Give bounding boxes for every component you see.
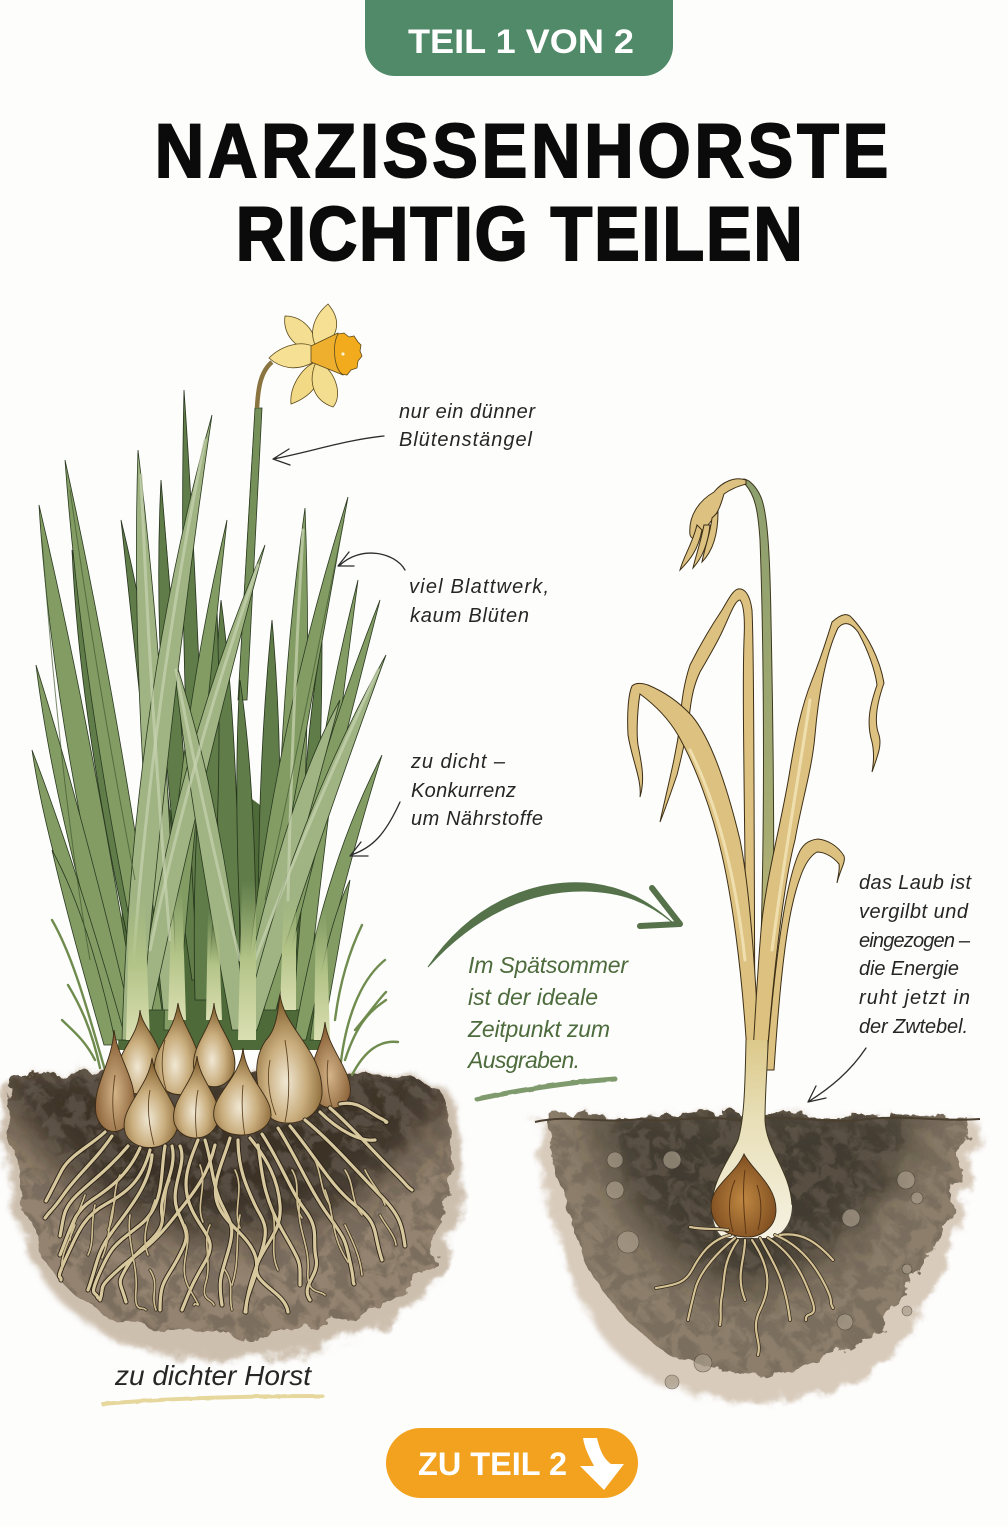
flower centre xyxy=(341,352,345,356)
mid leaves xyxy=(32,460,382,1045)
header tab label: TEIL 1 VON 2 xyxy=(408,23,634,61)
bulbs xyxy=(95,994,350,1148)
bulb roots xyxy=(45,1103,412,1312)
annotation: too dense xyxy=(350,751,543,856)
arrow xyxy=(350,802,400,856)
note: late summer xyxy=(466,952,629,1099)
thin flower stalk xyxy=(238,408,262,700)
note: late summer: Ausgraben. xyxy=(466,1047,580,1073)
roots xyxy=(656,1227,833,1355)
title: NARZISSENHORSTE xyxy=(155,110,888,194)
soil: single bulb xyxy=(536,1100,980,1403)
trumpet xyxy=(311,333,343,375)
light front leaves xyxy=(42,415,386,1040)
annotation: yellowed foliage: der Zwtebel. xyxy=(859,1016,968,1038)
petals xyxy=(285,316,316,350)
title xyxy=(155,110,888,277)
plant: dense narcissus clump xyxy=(32,390,412,1312)
button: to part 2 xyxy=(386,1428,638,1498)
header tab xyxy=(365,0,673,76)
annotation: yellowed foliage: vergilbt und xyxy=(859,901,969,923)
annotation: thin stalk: nur ein dünner xyxy=(399,401,536,423)
button: to part 2: ZU TEIL 2 xyxy=(418,1446,567,1482)
label: too dense clump xyxy=(103,1360,322,1404)
note: late summer: Im Spätsommer xyxy=(468,952,629,978)
annotation: thin stalk: Blütenstängel xyxy=(399,429,533,451)
annotation: yellowed foliage: das Laub ist xyxy=(859,872,972,894)
yellow underline xyxy=(103,1396,322,1404)
brown bulb xyxy=(711,1154,776,1237)
annotation: much foliage xyxy=(338,552,549,627)
pale lower stem xyxy=(712,1040,792,1238)
curved green arrow xyxy=(428,883,680,967)
annotation: yellowed foliage: die Energie xyxy=(859,958,959,980)
soil: dense clump xyxy=(0,1060,470,1358)
annotation: too dense: zu dicht – xyxy=(410,751,506,773)
note: late summer: ist der ideale xyxy=(468,984,598,1010)
green brush underline xyxy=(477,1079,615,1099)
wilted flower xyxy=(680,479,746,570)
lower stem outline xyxy=(712,1040,792,1205)
plant: withered narcissus xyxy=(628,479,884,1355)
arrow xyxy=(338,552,405,570)
pale leaf stems above bulbs xyxy=(126,880,330,1040)
annotation: too dense: Konkurrenz xyxy=(411,780,516,802)
annotation: yellowed foliage: eingezogen – xyxy=(859,930,971,952)
arrow xyxy=(808,1048,866,1102)
icon: bent arrow xyxy=(580,1438,624,1490)
note: late summer: Zeitpunkt zum xyxy=(467,1016,610,1042)
annotation: yellowed foliage xyxy=(808,872,972,1102)
annotation: much foliage: viel Blattwerk, xyxy=(409,576,549,598)
dark rear leaves xyxy=(72,390,322,1000)
title: RICHTIG TEILEN xyxy=(236,193,803,277)
annotation: too dense: um Nährstoffe xyxy=(411,808,543,830)
dark foliage mass xyxy=(118,790,330,1050)
soil surface and stones xyxy=(535,1118,980,1389)
arrow xyxy=(273,436,384,465)
side grass xyxy=(52,920,398,1075)
annotation: thin stalk xyxy=(273,401,536,465)
annotation: yellowed foliage: ruht jetzt in xyxy=(859,987,970,1009)
wilted stem xyxy=(744,479,774,1070)
label: too dense clump: zu dichter Horst xyxy=(114,1360,312,1391)
dried leaves xyxy=(628,589,884,1070)
bulb streaks xyxy=(729,1170,761,1234)
annotation: much foliage: kaum Blüten xyxy=(410,605,529,627)
flower neck xyxy=(257,362,272,408)
daffodil flower xyxy=(257,304,362,408)
